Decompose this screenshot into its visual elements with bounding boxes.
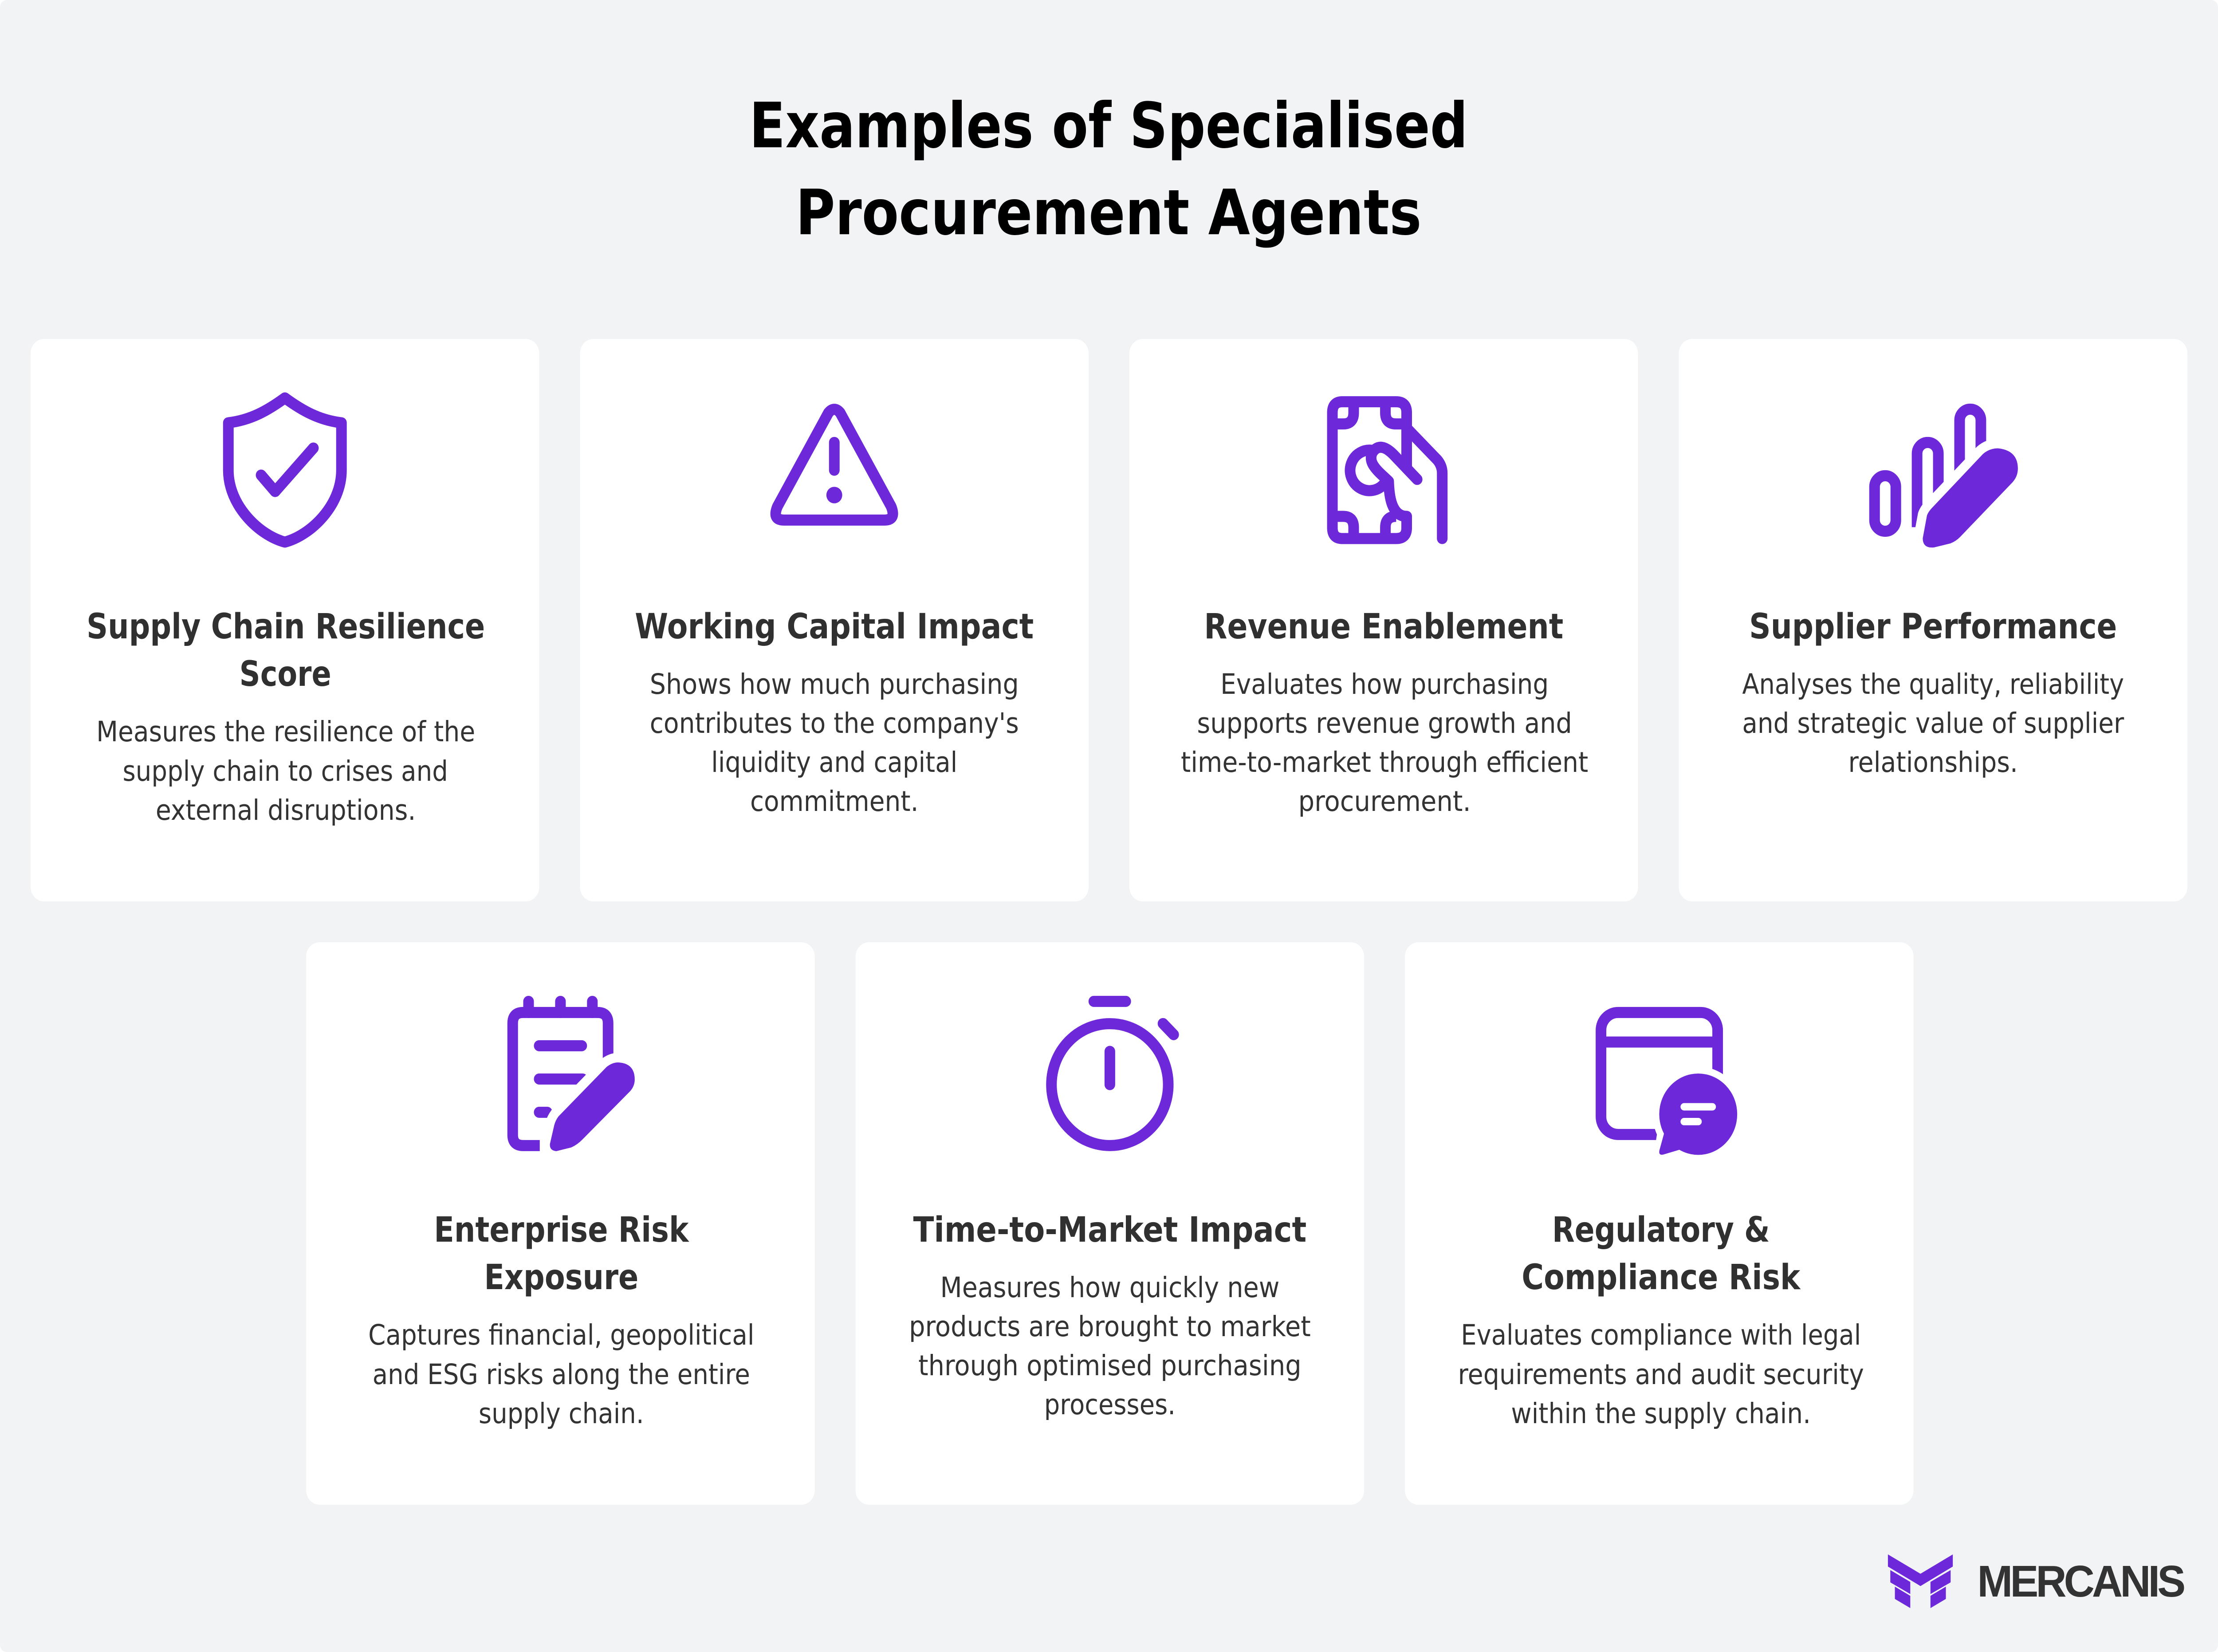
description: supply chain. <box>479 1397 644 1430</box>
description: Shows how much purchasing <box>650 668 1019 700</box>
heading: Regulatory & <box>1552 1210 1770 1250</box>
description <box>368 1319 755 1430</box>
title: Examples of Specialised <box>749 89 1468 162</box>
panel: Supply Chain Resilience Score <box>31 339 539 901</box>
description: contributes to the company's <box>650 707 1019 739</box>
icon: logo mark <box>1888 1554 1953 1608</box>
description: Measures the resilience of the <box>96 716 475 748</box>
icon: window with chat bubble <box>1601 1012 1744 1162</box>
description: within the supply chain. <box>1511 1397 1811 1430</box>
description: supply chain to crises and <box>123 755 448 787</box>
description: supports revenue growth and <box>1197 707 1572 739</box>
description <box>1742 668 2124 779</box>
title <box>749 89 1468 249</box>
description: products are brought to market <box>909 1310 1311 1343</box>
heading <box>87 607 485 694</box>
icon: stopwatch <box>1051 1001 1174 1145</box>
description: processes. <box>1044 1388 1176 1421</box>
icon: hand holding banknote <box>1333 402 1442 539</box>
panel: Time-to-Market Impact <box>856 942 1364 1505</box>
panel: Supplier Performance <box>1679 339 2187 901</box>
description: requirements and audit security <box>1458 1358 1864 1391</box>
heading: Compliance Risk <box>1522 1258 1801 1298</box>
description: relationships. <box>1848 746 2018 779</box>
description: and strategic value of supplier <box>1742 707 2124 739</box>
description <box>1458 1319 1864 1430</box>
description: external disruptions. <box>156 794 416 826</box>
description: commitment. <box>750 785 919 818</box>
description: through optimised purchasing <box>918 1349 1302 1382</box>
heading: Working Capital Impact <box>635 607 1034 647</box>
icon: warning triangle <box>776 409 893 520</box>
icon: notepad with pencil <box>513 1001 635 1151</box>
description: liquidity and capital <box>711 746 957 779</box>
description <box>909 1271 1311 1421</box>
description <box>1181 668 1588 818</box>
heading: Enterprise Risk <box>434 1210 689 1250</box>
description <box>96 716 475 826</box>
description: and ESG risks along the entire <box>373 1358 750 1391</box>
panel: Working Capital Impact <box>580 339 1089 901</box>
description: Captures financial, geopolitical <box>368 1319 755 1351</box>
description: time-to-market through efficient <box>1181 746 1588 779</box>
logo wordmark: MERCANIS <box>1977 1556 2186 1606</box>
title: Procurement Agents <box>796 176 1422 249</box>
heading: Exposure <box>484 1258 638 1298</box>
description: procurement. <box>1298 785 1471 818</box>
panel: Revenue Enablement <box>1129 339 1638 901</box>
logo: Mercanis <box>1888 1554 2186 1608</box>
description: Analyses the quality, reliability <box>1742 668 2124 700</box>
description: Evaluates compliance with legal <box>1461 1319 1861 1351</box>
icon: shield with check <box>228 398 342 542</box>
panel: Regulatory & Compliance Risk <box>1405 942 1914 1505</box>
heading: Time-to-Market Impact <box>913 1210 1306 1250</box>
description: Measures how quickly new <box>940 1271 1279 1304</box>
heading: Supplier Performance <box>1749 607 2117 647</box>
panel: Enterprise Risk Exposure <box>306 942 815 1505</box>
heading: Supply Chain Resilience <box>87 607 485 647</box>
heading <box>1522 1210 1801 1298</box>
description <box>650 668 1019 818</box>
heading: Score <box>240 654 331 694</box>
icon: bar chart with pencil <box>1875 409 2018 547</box>
heading <box>434 1210 689 1298</box>
heading: Revenue Enablement <box>1204 607 1563 647</box>
description: Evaluates how purchasing <box>1220 668 1549 700</box>
